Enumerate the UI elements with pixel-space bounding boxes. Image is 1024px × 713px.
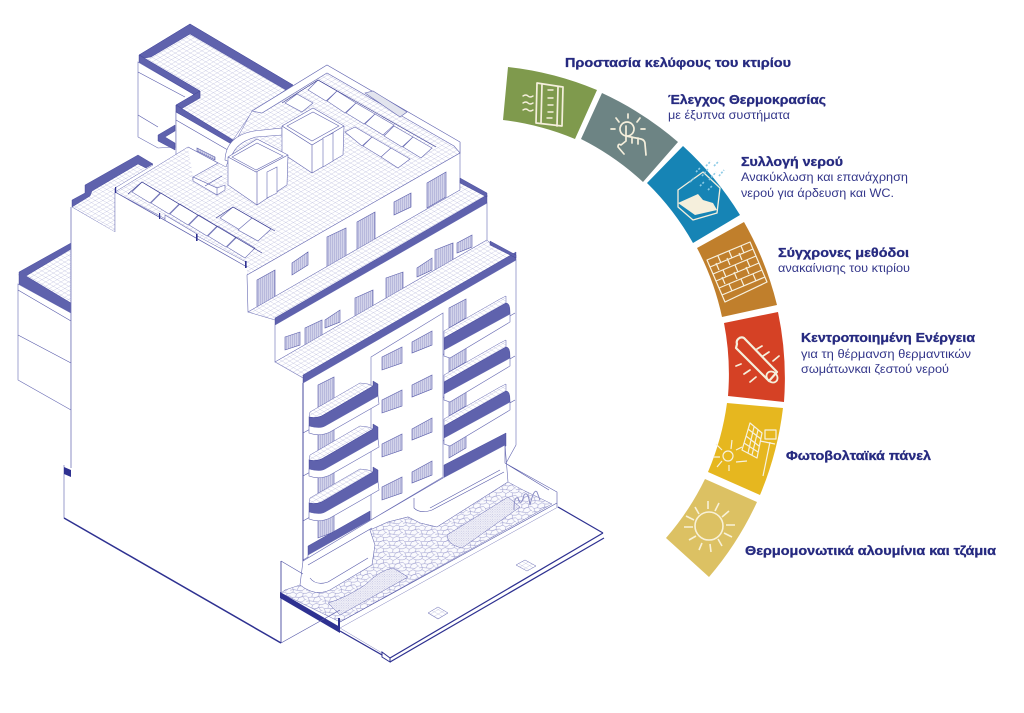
main roof deck xyxy=(115,65,460,275)
segment: building envelope xyxy=(503,67,597,139)
segment: water harvesting xyxy=(647,146,740,243)
balcony doors xyxy=(318,299,466,538)
facade windows xyxy=(382,331,432,500)
icon: sun xyxy=(684,501,735,552)
left annex block xyxy=(18,243,71,410)
label: water harvesting: Ανακύκλωση και επανάχρηση xyxy=(741,170,908,184)
label: central heating: για τη θέρμανση θερμαντικών xyxy=(801,347,971,361)
second floor facade xyxy=(275,203,487,362)
label: thermal glazing: Θερμομονωτικά αλουμίνια και τζάμια xyxy=(745,544,996,558)
icon: water tank xyxy=(678,161,724,220)
building axonometric drawing xyxy=(18,24,604,662)
label: renovation methods: Σύγχρονες μεθόδοι xyxy=(778,246,910,260)
label: central heating: Κεντροποιημένη Ενέργεια xyxy=(801,331,975,345)
stair box left xyxy=(228,139,288,205)
segment: central heating xyxy=(724,312,785,402)
rear tower with roof terrace xyxy=(138,24,293,170)
label: temperature control: Έλεγχος Θερμοκρασίας xyxy=(668,93,826,107)
icon: solar panel and sun xyxy=(713,423,776,476)
main facade xyxy=(303,260,516,567)
label: central heating xyxy=(801,331,975,376)
solar panels xyxy=(128,80,436,258)
label: water harvesting: νερού για άρδευση και WC. xyxy=(741,186,894,200)
icon: brick wall xyxy=(707,242,767,302)
stair box right xyxy=(282,108,344,173)
low planter xyxy=(188,147,225,195)
upper left parapet xyxy=(72,155,153,232)
label: renovation methods: ανακαίνισης του κτιρίου xyxy=(778,261,910,275)
label: water harvesting: Συλλογή νερού xyxy=(741,155,843,169)
segment: thermal glazing xyxy=(666,479,757,577)
arch between roof boxes xyxy=(225,128,282,162)
segment: temperature control xyxy=(581,93,678,182)
label: temperature control xyxy=(668,93,826,122)
left balconies xyxy=(308,381,379,562)
label: photovoltaics: Φωτοβολταϊκά πάνελ xyxy=(786,449,931,463)
upper terrace and band xyxy=(248,178,487,325)
segmented arc of upgrades xyxy=(503,67,785,577)
paved forecourt xyxy=(281,482,552,622)
sidewalk xyxy=(280,503,604,662)
right balconies xyxy=(444,296,510,477)
label: renovation methods xyxy=(778,246,910,275)
segment: renovation methods xyxy=(697,222,777,317)
label: envelope protection: Προστασία κελύφους του κτιρίου xyxy=(565,56,791,70)
building base and curbs xyxy=(281,445,557,593)
roof parapet low wall xyxy=(165,215,197,241)
icon: heating pipe xyxy=(736,337,780,385)
blank party wall xyxy=(64,187,303,643)
penthouse floor facade xyxy=(247,153,460,312)
segment: photovoltaic panels xyxy=(708,403,783,495)
icon: smart touch xyxy=(611,114,646,155)
icon: insulated wall xyxy=(523,83,563,126)
lower terrace and band xyxy=(275,240,516,383)
label: central heating: σωμάτωνκαι ζεστού νερού xyxy=(801,362,949,376)
label: water harvesting xyxy=(741,155,908,200)
label: temperature control: με έξυπνα συστήματα xyxy=(668,108,790,122)
